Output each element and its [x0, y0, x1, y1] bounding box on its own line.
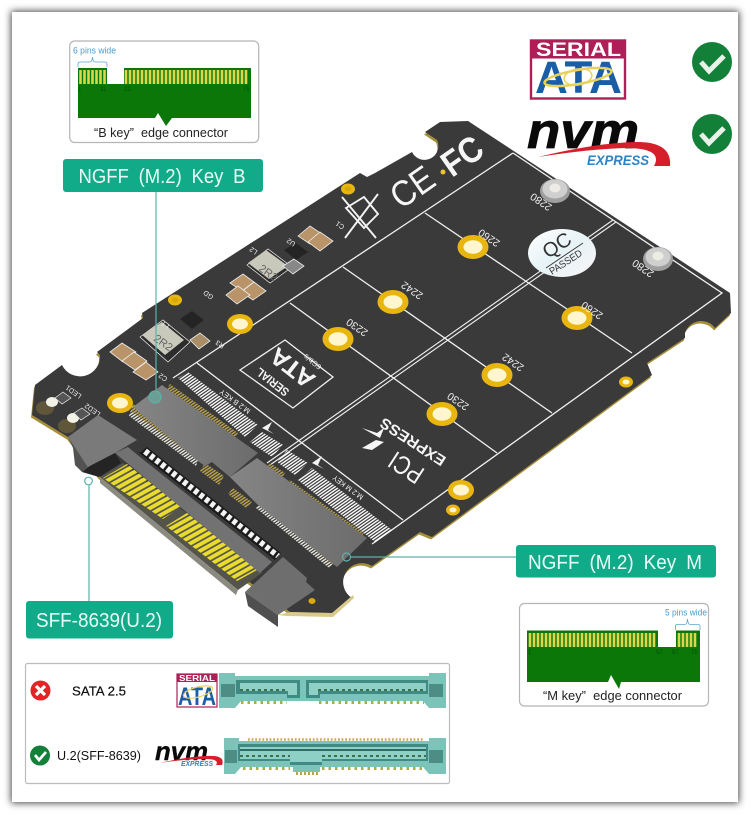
size labels [344, 190, 656, 412]
component labels: GD [203, 288, 215, 300]
component labels [65, 219, 346, 417]
logo: NVM Express: nvm [527, 103, 639, 159]
silkscreen stripe areas: M.2 B KEY [218, 387, 252, 416]
logo: NVM Express: EXPRESS [587, 152, 650, 168]
SATA silkscreen logo: 6Gb/s [302, 352, 323, 372]
M key caption: “M key” edge connector [543, 688, 683, 703]
size labels: 2230 [445, 389, 471, 412]
callout: NGFF key M: NGFF (M.2) Key M [528, 552, 702, 574]
B key pin numbers: 75 [243, 87, 250, 93]
component labels: U2 [286, 236, 297, 247]
sticker: QC passed [528, 228, 596, 278]
panel: M key edge connector [520, 604, 708, 706]
small Serial ATA logo: ATA [178, 683, 216, 711]
leader line: U.2 [85, 477, 92, 601]
U.2 end block [245, 557, 315, 615]
connector: M.2 B key socket [129, 384, 258, 485]
adapter board [31, 121, 731, 627]
standoff holes [107, 170, 633, 516]
icon: WEEE bin [342, 194, 378, 238]
connector: M.2 M key socket [228, 458, 367, 568]
power components [65, 219, 346, 417]
row: SATA not supported [30, 673, 446, 711]
U.2 signal pads [139, 447, 281, 560]
PCI Express silkscreen logo: EXPRESS [377, 414, 449, 469]
panel: B key edge connector [70, 41, 259, 142]
B key gold pins [80, 70, 246, 84]
silkscreen outline [173, 153, 722, 544]
size labels: 2242 [500, 350, 526, 373]
component labels: LED2 [84, 401, 102, 417]
callout: SFF-8639 [26, 601, 173, 638]
icon: check NVMe supported [692, 114, 732, 154]
M key pin numbers: 67 [672, 650, 679, 656]
inductor lower [140, 320, 190, 362]
leader line: key M [342, 553, 516, 561]
component labels: L1 [161, 319, 171, 329]
callout: NGFF key M [516, 545, 716, 578]
B key pin numbers [78, 87, 250, 93]
centre double line [267, 220, 616, 465]
component labels: L2 [249, 245, 259, 255]
leader line: key B [149, 192, 161, 403]
logo: Serial ATA: ATA [535, 52, 622, 103]
board pcb [32, 121, 731, 613]
PCI Express silkscreen logo [362, 414, 449, 490]
inductor upper [247, 249, 292, 284]
component labels: LED1 [65, 383, 83, 399]
callout: SFF-8639: SFF-8639(U.2) [36, 610, 162, 632]
U.2 gold fingers [100, 463, 262, 590]
B key pin numbers: 21 [124, 87, 131, 93]
callout: NGFF key B [63, 159, 263, 192]
M key gold pins [530, 633, 695, 647]
size labels: 2260 [476, 226, 502, 249]
component labels: C1 [335, 219, 346, 230]
B key pin width note: 6 pins wide [73, 46, 116, 56]
SATA connector drawing [219, 673, 446, 708]
SMD capacitors [110, 226, 333, 380]
small NVMe logo: EXPRESS [181, 761, 213, 768]
U.2 left block [68, 415, 137, 467]
metal screws [540, 179, 673, 271]
SATA row label: SATA 2.5 [72, 684, 126, 698]
small NVMe logo: nvm [155, 736, 208, 766]
logo: Serial ATA: SERIAL [536, 40, 621, 61]
size labels: 2242 [399, 278, 425, 301]
inductor lower: 2R2 [151, 333, 175, 354]
U chips [284, 243, 308, 260]
certification marks: CE [382, 157, 442, 217]
size labels: 2260 [579, 298, 605, 321]
icon: check SATA supported [692, 42, 732, 82]
M key brace [676, 619, 700, 630]
B key pin numbers: 1 [78, 87, 82, 93]
U.2 housing bar [115, 447, 272, 573]
B key pin numbers: 11 [100, 87, 107, 93]
board gold edge [31, 124, 730, 616]
component labels: R3 [215, 338, 226, 349]
M key pin numbers: 57 [656, 650, 663, 656]
SATA silkscreen logo: SERIAL [253, 365, 292, 399]
small Serial ATA logo [177, 674, 217, 711]
silkscreen stripe areas: M.2 M KEY [331, 473, 365, 502]
certification marks: FC [433, 127, 491, 185]
sticker: QC passed: QC [539, 228, 576, 263]
B key caption: “B key” edge connector [94, 125, 229, 140]
connector: U.2 SFF-8639 plug [68, 415, 354, 627]
size labels: 2280 [528, 190, 554, 213]
M key pin numbers: 1 [528, 650, 532, 656]
icon: green check [30, 746, 50, 766]
B key pcb edge [78, 68, 251, 126]
U.2 connector drawing [224, 738, 446, 774]
logo: NVM Express [527, 103, 670, 168]
PCI Express silkscreen logo: PCI [383, 445, 429, 490]
callout: NGFF key B: NGFF (M.2) Key B [78, 166, 246, 188]
component labels: C2 [158, 371, 169, 382]
SATA silkscreen logo [240, 340, 333, 408]
size labels: 2230 [344, 315, 370, 338]
silkscreen stripe areas [178, 372, 392, 542]
inductor upper: 2R2 [256, 263, 280, 284]
certification marks [382, 127, 491, 217]
row: U.2 supported [30, 736, 446, 774]
M key pin numbers [528, 650, 698, 656]
sticker: QC passed: PASSED [548, 248, 585, 278]
icon: red cross [30, 680, 50, 700]
SATA silkscreen logo: ATA [265, 341, 321, 394]
panel: compatibility table [26, 664, 450, 784]
M key pin numbers: 75 [691, 650, 698, 656]
M key pcb edge [527, 630, 700, 689]
B key brace [78, 57, 107, 67]
status LEDs [36, 392, 90, 433]
U.2 row label: U.2(SFF-8639) [57, 748, 141, 763]
size labels: 2280 [630, 256, 656, 279]
M key pin width note: 5 pins wide [665, 608, 707, 618]
small Serial ATA logo: SERIAL [179, 674, 215, 683]
